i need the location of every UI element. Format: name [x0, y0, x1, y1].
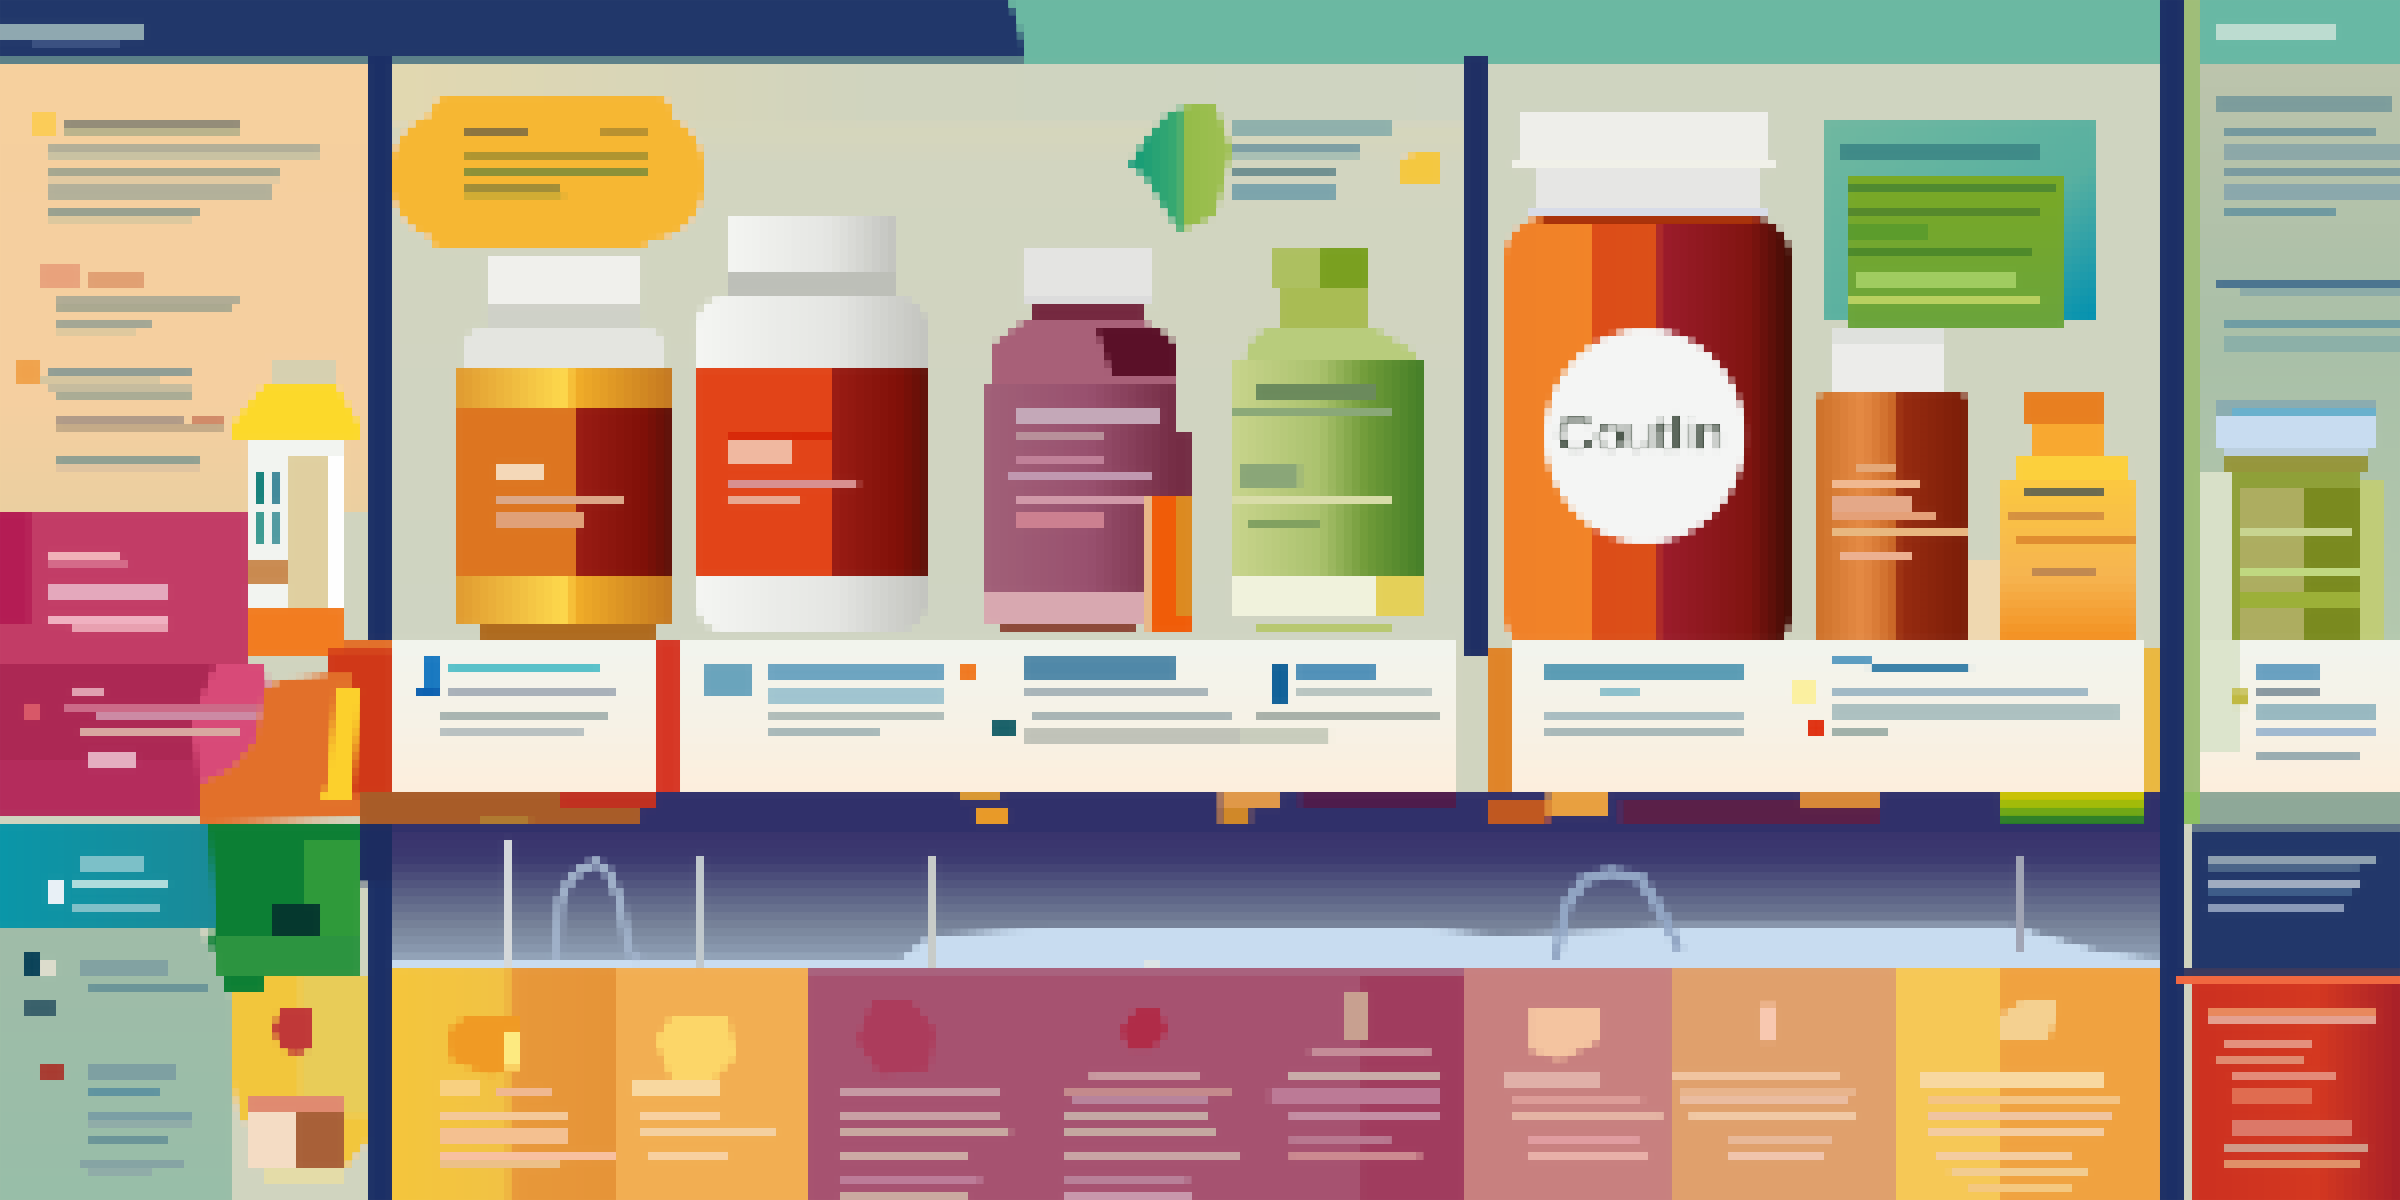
icon: pale cluster	[1530, 1008, 1600, 1060]
chart: light blue wave	[392, 926, 2160, 968]
header bar: teal strip	[1008, 0, 2400, 64]
chart: bell curve left	[556, 862, 640, 960]
text block: column 1	[440, 1080, 616, 1168]
text block: plum label	[1008, 408, 1160, 528]
text block: amber label	[496, 464, 624, 528]
label: round white badge	[1545, 329, 1745, 543]
icon: small tick	[1760, 1005, 1776, 1041]
illustration: tube with yellow cap	[232, 360, 360, 656]
text block: caption 1	[416, 656, 616, 736]
text block: magenta upper	[48, 552, 168, 632]
bottle: plum	[984, 248, 1192, 632]
text block: leaf callout	[1232, 120, 1392, 200]
text block: right upper	[2216, 96, 2400, 216]
column: rose	[808, 968, 1464, 1200]
text block: small bottle label	[2008, 488, 2136, 576]
bottle: right blue-cap jar	[2200, 400, 2384, 640]
chart: vertical marker lines	[504, 840, 2024, 1026]
text block: second item	[40, 264, 240, 336]
text block: magenta lower	[24, 688, 264, 768]
icon: small gem	[2000, 1000, 2056, 1040]
column: light orange	[616, 968, 808, 1200]
text block: column 2	[632, 1080, 776, 1160]
text block: green label	[1232, 384, 1392, 528]
panel: second bottle shelf background	[1488, 64, 2160, 640]
header bar: navy title strip	[0, 0, 1024, 64]
panel: right navy note	[2192, 824, 2400, 968]
bottle: small yellow-orange	[1968, 392, 2136, 640]
chart: bell curve right	[1556, 872, 1680, 960]
text block: right middle	[2216, 280, 2400, 352]
bottle: large orange with round label	[1504, 112, 1792, 656]
icon: ruby	[1120, 1008, 1168, 1050]
panel: magenta callouts	[0, 512, 272, 816]
panel: left peach information column	[0, 64, 368, 512]
illustration: orange and red ribbon shape	[200, 640, 392, 824]
panel: right red note	[2176, 968, 2400, 1200]
callout: yellow bubble	[392, 96, 704, 248]
text block: caption 2	[704, 664, 1016, 736]
column: pink	[1464, 968, 1672, 1200]
icon: small jar	[248, 1096, 344, 1184]
icon: red cluster	[856, 1000, 936, 1076]
text block: column 3	[840, 1088, 1010, 1200]
icon: small tick	[1344, 992, 1368, 1040]
panel: cream caption cards	[392, 640, 2160, 800]
card: teal and green notes	[1824, 120, 2096, 328]
text block: caption 6	[1792, 656, 2120, 736]
text block: caption 5	[1544, 664, 1744, 736]
bottle: amber	[456, 256, 672, 640]
text block: medium bottle label	[1832, 464, 1968, 560]
panel: teal callout	[0, 824, 216, 928]
text block: red note	[2208, 1008, 2376, 1168]
text block: caption 4	[1240, 664, 1440, 744]
column: yellow-orange	[392, 968, 616, 1200]
column: salmon	[1672, 968, 1896, 1200]
label: round white badge: Coutlin	[1555, 408, 1725, 461]
panel: coloured band beneath cards	[360, 792, 2160, 832]
panel: sage notes	[0, 928, 232, 1200]
text block: column 7	[1672, 1072, 1856, 1160]
text block: red label	[728, 432, 858, 504]
text block: column 6	[1504, 1072, 1662, 1160]
panel: navy vertical dividers	[368, 0, 2184, 1200]
icon: green leaf	[1128, 104, 1232, 232]
text block: third item	[16, 360, 224, 472]
bottle: green	[1232, 248, 1424, 632]
bottle: red	[696, 216, 928, 632]
column: yellow	[1896, 968, 2160, 1200]
panel: main bottle shelf background	[392, 64, 1464, 640]
text block: first item	[32, 112, 320, 224]
icon: yellow gem	[656, 1016, 736, 1080]
text block: column 5	[1270, 1048, 1440, 1160]
text block: right cream caption	[2200, 640, 2400, 792]
icon: yellow spark	[1400, 152, 1440, 184]
panel: right sage column	[2184, 0, 2400, 824]
text block: caption 3	[1024, 656, 1240, 744]
text block: column 8	[1920, 1072, 2120, 1192]
chart: sky-gradient wave strip	[360, 824, 2160, 1026]
bottle: medium orange-brown	[1816, 328, 1968, 648]
panel: yellow block with ruby and jar	[232, 976, 368, 1184]
icon: ruby	[272, 1008, 312, 1056]
text block: column 4	[1064, 1072, 1240, 1200]
panel: green block with dark dot	[208, 824, 360, 992]
icon: orange gem	[448, 1016, 520, 1076]
panel: coloured columns	[392, 968, 2160, 1200]
